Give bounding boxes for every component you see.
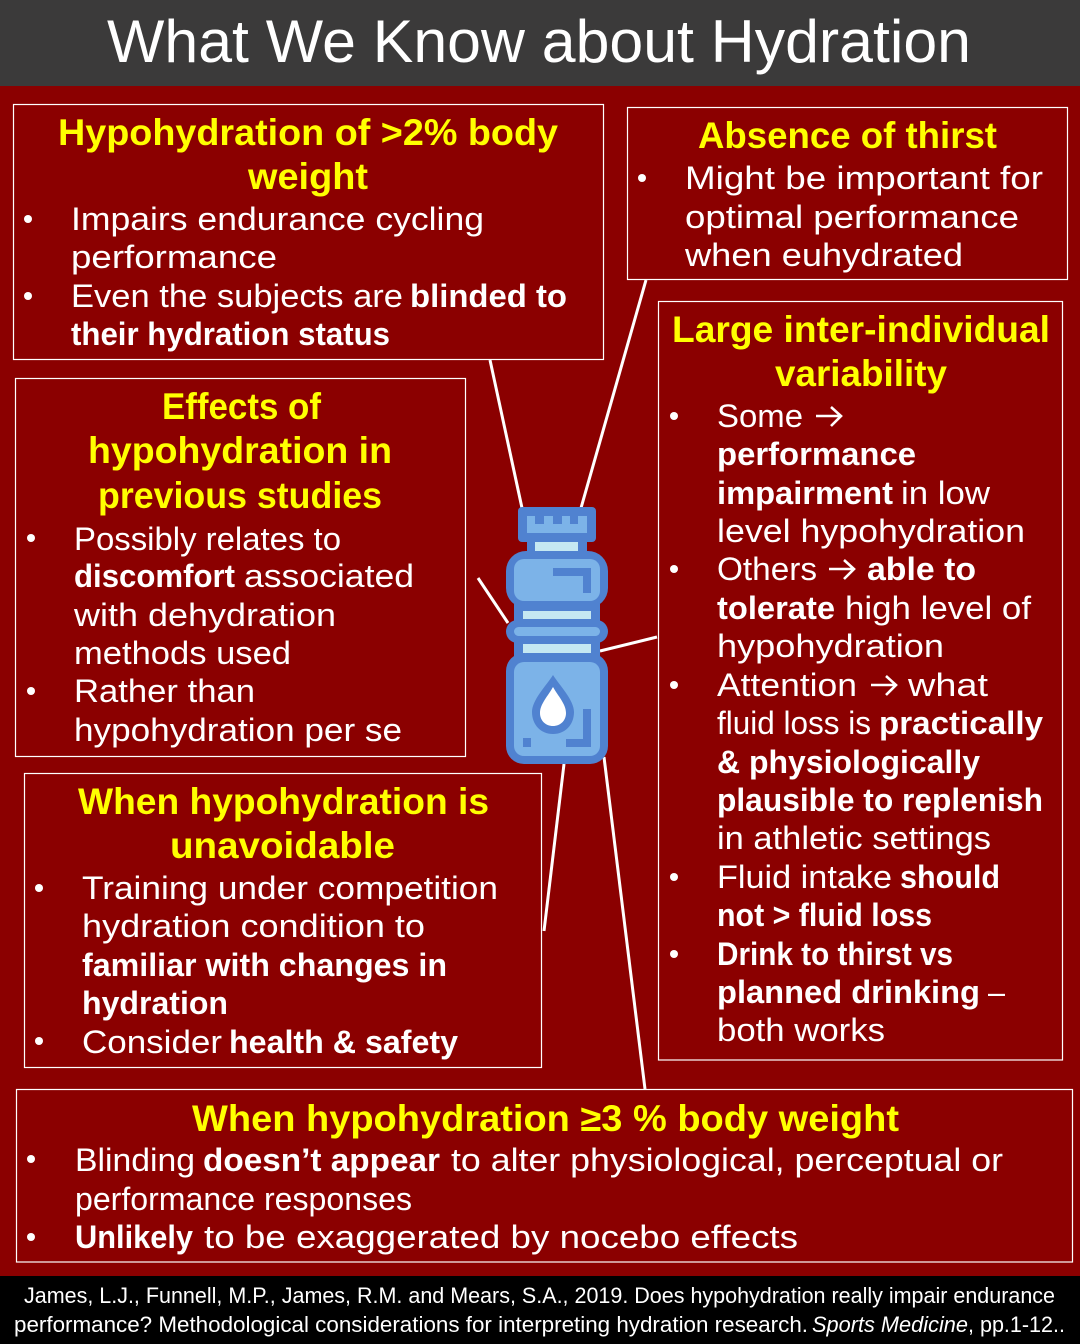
heading: when hypohydration is unavoidable xyxy=(78,781,489,866)
bullet list: optimal performance: Might be important for xyxy=(685,160,1043,196)
bullet list: blinding and nocebo: performance responses xyxy=(75,1181,412,1217)
bullet list: training and safety: Training under competition xyxy=(82,870,498,906)
bullet list: variability points: Others xyxy=(717,551,817,587)
bullet list: discomfort: with dehydration xyxy=(73,597,336,633)
bullet list: endurance cycling: blinded to xyxy=(410,278,567,314)
panel: absence of thirst xyxy=(628,108,1068,280)
heading: when hypohydration is unavoidable: unavoidable xyxy=(170,825,395,866)
panel: effects of hypohydration in previous studies xyxy=(16,378,466,756)
bullet list: variability points: what xyxy=(907,667,988,703)
bullet list: training and safety: hydration condition to xyxy=(82,908,425,944)
bullet list: training and safety xyxy=(35,870,498,1060)
arrow: attention xyxy=(871,676,896,695)
bullet list: endurance cycling: Impairs endurance cycling xyxy=(71,201,484,237)
bullet list: training and safety: health & safety xyxy=(229,1024,458,1060)
arrow: some xyxy=(816,407,841,426)
citation footer: James, L.J., Funnell, M.P., James, R.M. and Mears, S.A., 2019. Does hypohydration really impair endurance xyxy=(24,1283,1055,1308)
citation footer: performance? Methodological considerations for interpreting hydration research. xyxy=(14,1312,808,1337)
bullet list: variability points: Fluid intake xyxy=(717,859,892,895)
bullet list: training and safety: familiar with changes in xyxy=(82,947,447,983)
bullet list: variability points: fluid loss is xyxy=(717,705,871,741)
connector lines from bottle to panels xyxy=(478,280,657,1089)
bullet list: blinding and nocebo: Unlikely xyxy=(75,1219,193,1255)
bullet list: variability points: in low xyxy=(901,475,991,511)
bullet list: variability points: level hypohydration xyxy=(717,513,1025,549)
title banner: What We Know about Hydration xyxy=(107,8,971,75)
bullet list: blinding and nocebo: doesn’t appear xyxy=(203,1142,440,1178)
bullet list: training and safety: hydration xyxy=(82,985,228,1021)
heading: effects of hypohydration: Effects of xyxy=(162,386,322,427)
bullet list: variability points: – xyxy=(988,974,1005,1010)
heading: large inter-individual variability xyxy=(672,309,1050,394)
bullet list: discomfort: hypohydration per se xyxy=(74,712,402,748)
bullet list: variability points: plausible to replenish xyxy=(717,782,1043,818)
bullet list: variability points: hypohydration xyxy=(717,628,944,664)
bullet list: discomfort: associated xyxy=(244,558,414,594)
heading: effects of hypohydration: previous studies xyxy=(98,475,382,516)
title banner xyxy=(0,0,1080,86)
bullet list: variability points: not > fluid loss xyxy=(717,897,932,933)
heading: effects of hypohydration: hypohydration in xyxy=(88,430,392,471)
bullet list: endurance cycling: their hydration status xyxy=(71,316,390,352)
heading: large inter-individual variability: variability xyxy=(775,353,947,394)
citation footer: Sports Medicine xyxy=(812,1312,968,1337)
arrow: others xyxy=(829,560,854,579)
bullet list: endurance cycling: Even the subjects are xyxy=(71,278,403,314)
bullet list: variability points: in athletic settings xyxy=(717,820,991,856)
bullet list: variability points: high level of xyxy=(845,590,1031,626)
icon: water bottle xyxy=(506,507,608,764)
bullet list: variability points: Attention xyxy=(717,667,857,703)
bullet list: variability points: tolerate xyxy=(717,590,835,626)
heading: hypohydration of >2% xyxy=(58,112,558,197)
bullet list: variability points: performance xyxy=(717,436,916,472)
bullet list: endurance cycling xyxy=(24,201,567,352)
panel: hypohydration of >2% body weight xyxy=(14,104,604,360)
bullet list: variability points xyxy=(670,398,1043,1048)
bullet list: variability points: planned drinking xyxy=(717,974,980,1010)
bullet list: blinding and nocebo xyxy=(27,1142,1003,1255)
panel: when hypohydration ≥3 % body weight xyxy=(16,1090,1072,1262)
bullet list: discomfort: discomfort xyxy=(74,558,235,594)
heading: effects of hypohydration xyxy=(88,386,392,516)
bullet list: discomfort xyxy=(27,521,414,748)
bullet list: variability points: should xyxy=(900,859,1000,895)
bullet list: endurance cycling: performance xyxy=(71,239,277,275)
heading: hypohydration of >2%: weight xyxy=(247,156,368,197)
panel: large inter-individual variability xyxy=(658,302,1062,1060)
panel: when hypohydration is unavoidable xyxy=(24,774,542,1068)
heading: large inter-individual variability: Large inter-individual xyxy=(672,309,1050,350)
bullet list: discomfort: methods used xyxy=(74,635,291,671)
bullet list: discomfort: Rather than xyxy=(74,673,255,709)
bullet list: variability points: practically xyxy=(879,705,1043,741)
bullet list: optimal performance: when euhydrated xyxy=(684,237,963,273)
bullet list: optimal performance xyxy=(638,160,1043,273)
heading: when hypohydration is unavoidable: When hypohydration is xyxy=(78,781,489,822)
bullet list: blinding and nocebo: to alter physiological, perceptual or xyxy=(451,1142,1003,1178)
bullet list: variability points: impairment xyxy=(717,475,893,511)
bullet list: variability points: able to xyxy=(867,551,976,587)
bullet list: training and safety: Consider xyxy=(82,1024,222,1060)
bullet list: discomfort: Possibly relates to xyxy=(74,521,341,557)
bullet list: optimal performance: optimal performance xyxy=(685,199,1019,235)
heading: when hypohydration ≥3 %: When hypohydration ≥3 % body weight xyxy=(192,1098,899,1139)
bullet list: variability points: Some xyxy=(717,398,803,434)
citation footer: , pp.1-12.. xyxy=(968,1312,1065,1337)
bullet list: variability points: both works xyxy=(717,1012,885,1048)
bullet list: blinding and nocebo: to be exaggerated by nocebo effects xyxy=(204,1219,798,1255)
heading: hypohydration of >2%: Hypohydration of >2% body xyxy=(58,112,558,153)
heading: absence of thirst: Absence of thirst xyxy=(698,115,997,156)
citation footer xyxy=(0,1276,1080,1344)
bullet list: blinding and nocebo: Blinding xyxy=(75,1142,195,1178)
bullet list: variability points: Drink to thirst vs xyxy=(717,936,953,972)
bullet list: variability points: & physiologically xyxy=(717,744,980,780)
